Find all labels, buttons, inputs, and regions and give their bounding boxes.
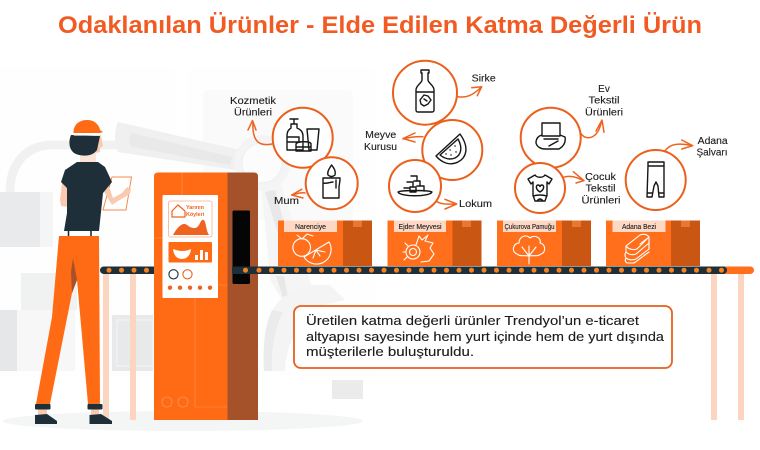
box: Narenciye: Narenciye	[295, 224, 326, 231]
product: Kozmetik Ürünleri: Kozmetik	[230, 96, 277, 107]
product: Adana Şalvarı: Şalvarı	[696, 148, 728, 159]
conveyor belt	[100, 266, 754, 274]
product: Ev Tekstil Ürünleri: Tekstil	[588, 96, 620, 107]
hair	[69, 135, 100, 156]
box: Ejder Meyvesi	[388, 220, 482, 266]
product: Meyve Kurusu	[364, 120, 482, 180]
arms	[60, 183, 70, 207]
Yarının Köyleri logo: Köyleri	[186, 212, 205, 218]
Yarının Köyleri logo: Yarının	[186, 205, 204, 211]
helmet	[73, 120, 103, 133]
worker figure	[35, 120, 132, 424]
box: Narenciye	[278, 220, 372, 266]
product: Çocuk Tekstil Ürünleri: Tekstil	[586, 184, 616, 195]
box: Adana Bezi	[606, 220, 700, 266]
clipboard	[103, 177, 132, 210]
orange chart panel	[168, 242, 212, 262]
product: Ev Tekstil Ürünleri: Ev	[598, 84, 610, 95]
product: Çocuk Tekstil Ürünleri: Çocuk	[585, 172, 617, 183]
box: Çukurova Pamuğu: Çukurova Pamuğu	[504, 224, 555, 231]
belt loops	[68, 231, 91, 236]
product: Sirke	[393, 61, 496, 125]
box: Adana Bezi: Adana Bezi	[622, 224, 656, 231]
icon: citrus	[293, 234, 331, 264]
product: Meyve Kurusu: Kurusu	[364, 142, 397, 153]
box: Ejder Meyvesi: Ejder Meyvesi	[398, 224, 442, 231]
product: Kozmetik Ürünleri	[230, 96, 333, 168]
trousers	[36, 236, 100, 404]
title: Odaklanılan Ürünler - Elde Edilen Katma Değerli Ürün	[58, 12, 702, 39]
floor shadow	[3, 411, 363, 431]
icon: cotton	[513, 236, 545, 264]
box: Çukurova Pamuğu	[497, 220, 591, 266]
neck	[80, 152, 96, 164]
product: Çocuk Tekstil Ürünleri	[515, 163, 620, 213]
icon: dragon fruit	[403, 235, 434, 262]
product: Meyve Kurusu: Meyve	[365, 130, 397, 141]
product: Ev Tekstil Ürünleri	[521, 84, 623, 168]
product: Adana Şalvarı: Adana	[698, 136, 728, 147]
product: Mum: Mum	[274, 196, 299, 207]
callout text box: altyapısı sayesinde hem yurt içinde hem de yurt dışında	[306, 329, 665, 344]
callout text box: müşterilerle buluşturuldu.	[306, 344, 474, 359]
product: Lokum	[389, 160, 492, 212]
shirt	[61, 162, 112, 231]
product: Lokum: Lokum	[459, 199, 492, 210]
product: Ev Tekstil Ürünleri: Ürünleri	[585, 106, 623, 118]
face	[96, 135, 103, 153]
machine screen	[162, 195, 218, 298]
callout text box: Üretilen katma değerli ürünler Trendyol’un e-ticaret	[306, 313, 639, 328]
product: Sirke: Sirke	[472, 74, 496, 85]
product: Adana Şalvarı	[626, 136, 728, 210]
product: Çocuk Tekstil Ürünleri: Ürünleri	[582, 194, 620, 206]
icon: fabric stack	[625, 234, 649, 263]
Yarının Köyleri logo	[168, 201, 212, 237]
product: Mum	[274, 157, 358, 209]
product: Kozmetik Ürünleri: Ürünleri	[234, 106, 272, 118]
conveyor support legs	[103, 274, 744, 420]
machine	[154, 172, 262, 420]
callout text box	[294, 306, 672, 368]
background scene: factory and robot arm	[0, 67, 377, 399]
